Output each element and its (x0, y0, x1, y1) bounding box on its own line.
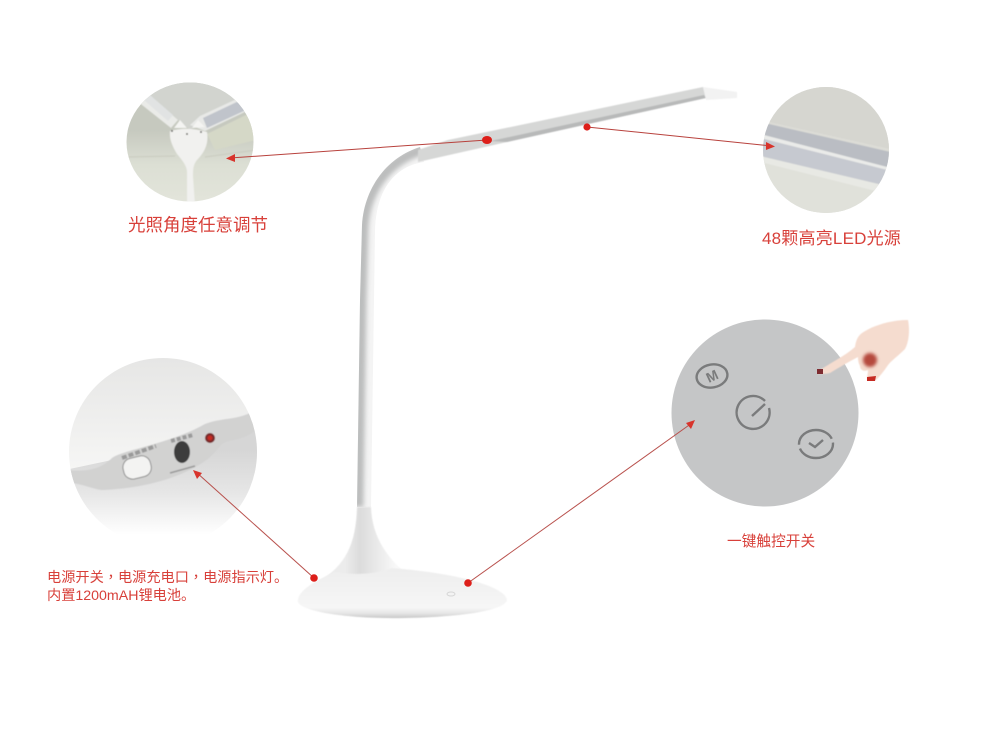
upper wall background (151, 82, 234, 129)
callout: angle arrow (226, 136, 492, 162)
light channel lip (764, 157, 878, 190)
callout: touch arrow (464, 420, 695, 587)
panel: ports and switch detail (47, 358, 288, 604)
heading: touch switch: 一键触控开关 (727, 533, 815, 550)
lamp (298, 87, 737, 618)
lamp head (418, 87, 737, 162)
icon: pointing hand (817, 320, 909, 381)
lamp stem and neck (357, 147, 424, 507)
fold line (126, 150, 256, 157)
lamp head light strip (490, 95, 706, 142)
charging port (174, 441, 190, 463)
icon: M mode: M (703, 366, 721, 386)
callout: ports arrow (193, 470, 318, 582)
description: ports: 电源开关，电源充电口，电源指示灯。 (47, 570, 288, 586)
lower surface (760, 162, 895, 220)
heading: adjustable angle: 光照角度任意调节 (128, 215, 268, 235)
description: battery: 内置1200mAH锂电池。 (47, 588, 195, 604)
light channel ridge (764, 135, 886, 170)
lamp base flare (318, 507, 420, 584)
hinge joints (174, 120, 205, 128)
left arm (141, 100, 178, 128)
light channel upper (765, 124, 889, 167)
right arm (190, 100, 244, 132)
hinge and cable (170, 129, 208, 205)
infographic: desk lamp feature callouts (48, 82, 910, 618)
lamp head end cap (703, 87, 737, 100)
light channel lower (763, 139, 886, 184)
panel: LED light source detail (760, 80, 901, 248)
shade under strip (70, 430, 257, 514)
indicator light (205, 433, 215, 443)
icon: timer (799, 430, 833, 458)
panel: adjustable angle detail (126, 82, 268, 233)
heading: LED source: 48颗高亮LED光源 (762, 229, 901, 248)
port strip (65, 413, 262, 490)
callout: LED arrow (583, 123, 775, 150)
right under-arm shading (208, 115, 254, 142)
lamp base (298, 568, 507, 618)
hinge screws (171, 130, 173, 132)
panel: touch switch detail (672, 320, 909, 550)
switch label marks (122, 446, 156, 458)
icon: power (737, 396, 770, 429)
base touch icon (447, 592, 455, 596)
icon: M mode (695, 362, 729, 390)
top surface (770, 87, 889, 148)
power switch (122, 454, 152, 480)
